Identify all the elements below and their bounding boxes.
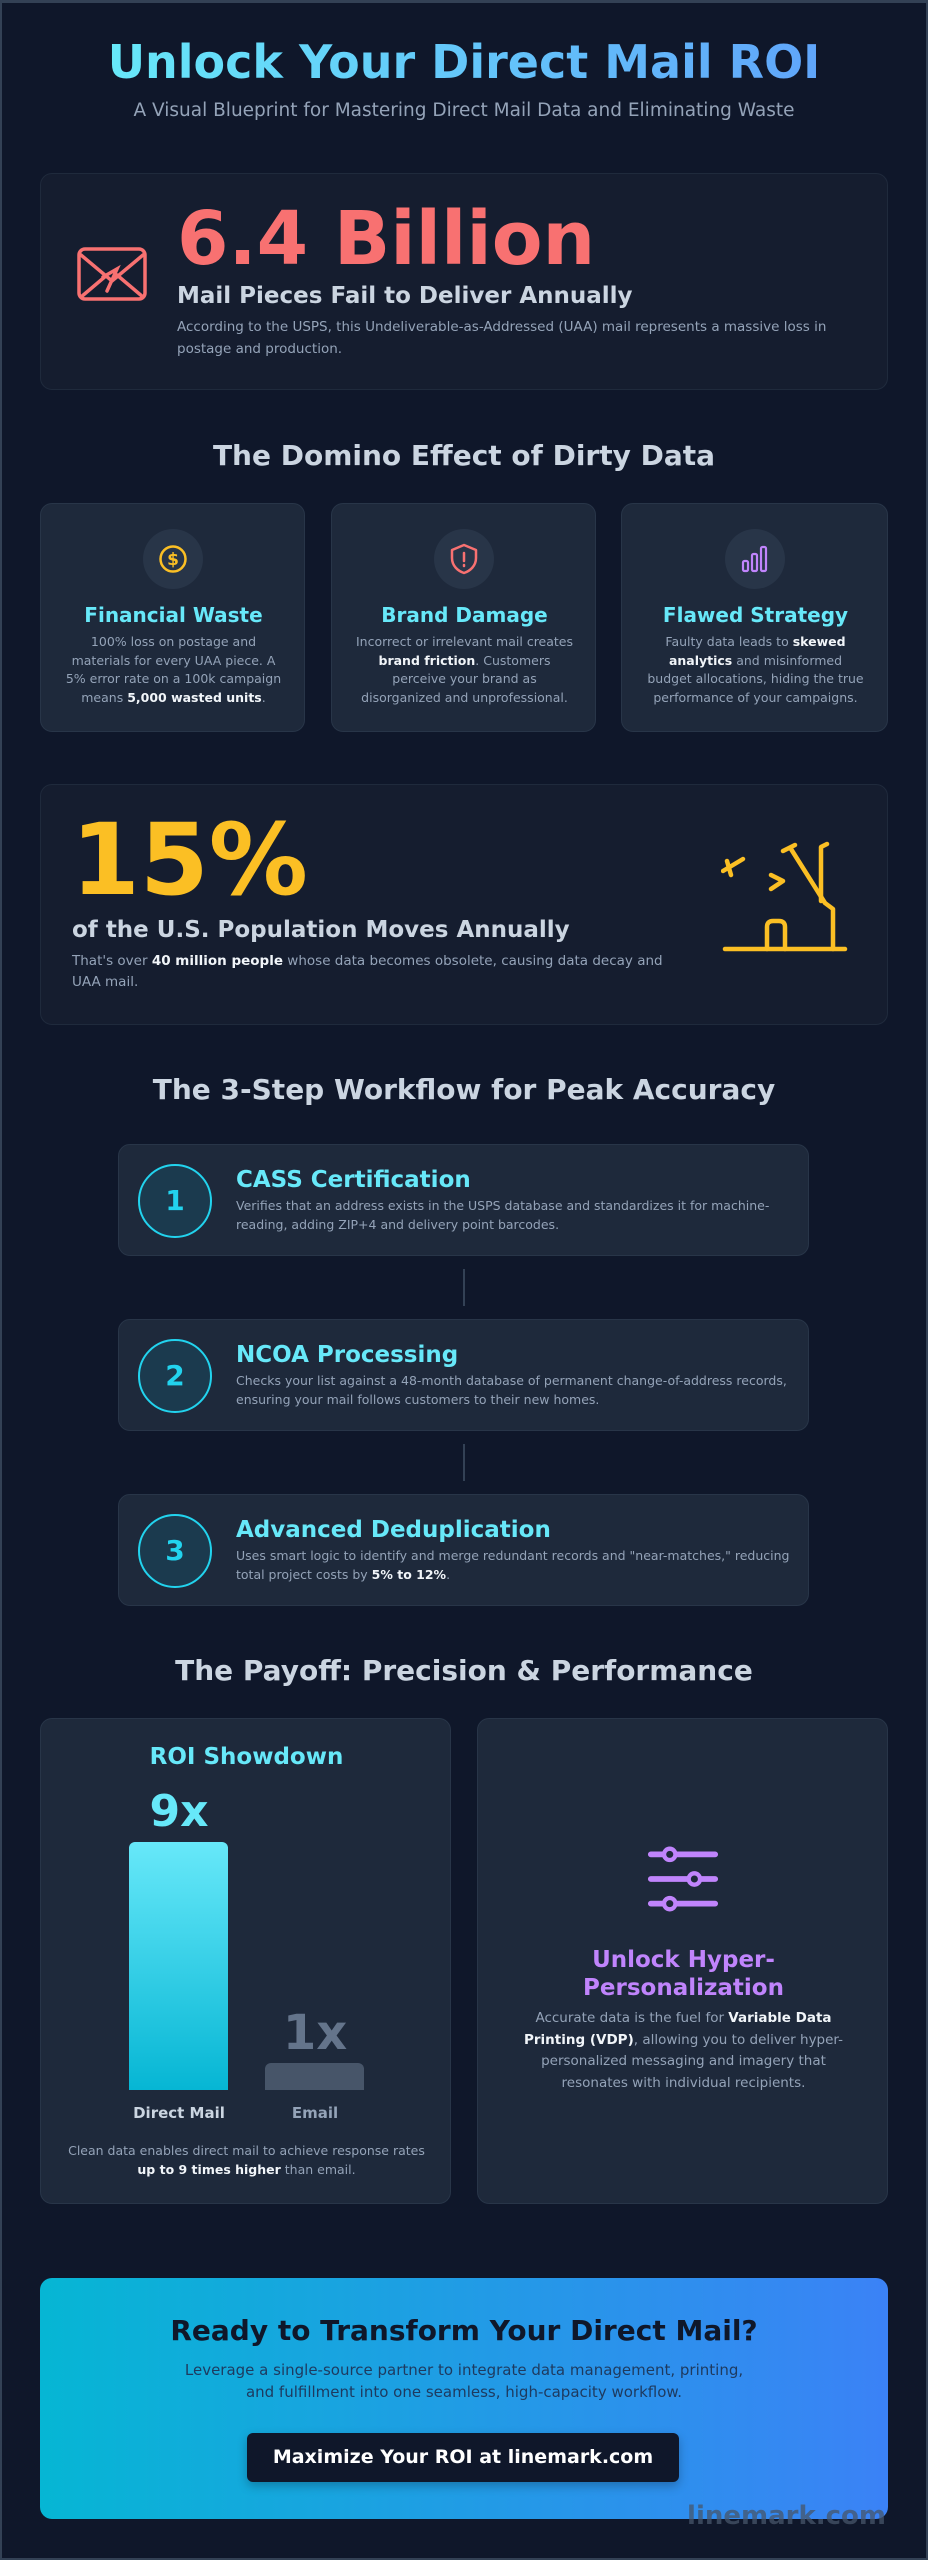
card text: means 5,000 wasted units. <box>81 690 266 705</box>
card text: disorganized and unprofessional. <box>361 690 568 705</box>
panel text: personalized messaging and imagery that <box>541 2053 826 2069</box>
chart caption: Clean data enables direct mail to achieve response rates <box>68 2143 425 2158</box>
card title: Brand Damage <box>381 603 548 627</box>
title: Unlock Your Direct Mail ROI <box>108 35 820 89</box>
subheading: Mail Pieces Fail to Deliver Annually <box>177 283 633 309</box>
card title: Financial Waste <box>84 603 263 627</box>
CTA text: Leverage a single-source partner to integrate data management, printing, <box>185 2361 743 2379</box>
panel: call to action <box>40 2278 888 2519</box>
CTA button: Maximize Your ROI at linemark.com <box>273 2446 653 2468</box>
icon: envelope <box>77 247 147 301</box>
description: UAA mail. <box>72 974 138 990</box>
step title: NCOA Processing <box>236 1342 458 1368</box>
number circle <box>138 1339 212 1413</box>
step text: Uses smart logic to identify and merge redundant records and "near-matches," reducing <box>236 1548 789 1563</box>
step 1 <box>118 1144 809 1256</box>
step 3 <box>118 1494 809 1606</box>
watermark: linemark.com <box>687 2501 886 2531</box>
step text: ensuring your mail follows customers to their new homes. <box>236 1392 599 1407</box>
value label 1x: 1x <box>283 2005 347 2061</box>
chart caption <box>68 2143 425 2177</box>
card text <box>356 634 573 705</box>
value label 9x: 9x <box>150 1786 208 1837</box>
CTA text <box>185 2361 743 2401</box>
heading: payoff: The Payoff: Precision & Performance <box>175 1654 753 1687</box>
card text <box>647 634 864 705</box>
step text: reading, adding ZIP+4 and delivery point barcodes. <box>236 1217 559 1232</box>
card text: 5% error rate on a 100k campaign <box>66 671 281 686</box>
subtitle: A Visual Blueprint for Mastering Direct Mail Data and Eliminating Waste <box>133 100 795 121</box>
heading: domino effect: The Domino Effect of Dirty Data <box>213 439 715 472</box>
bar: email <box>265 2063 364 2090</box>
step text: Verifies that an address exists in the USPS database and standardizes it for machine- <box>236 1198 769 1213</box>
step text <box>236 1198 769 1232</box>
card text: budget allocations, hiding the true <box>647 671 864 686</box>
panel title: Unlock Hyper- <box>592 1947 775 1973</box>
panel text <box>524 2010 843 2091</box>
panel: ROI showdown chart <box>40 1718 451 2204</box>
panel: hyper-personalization <box>477 1718 888 2204</box>
number circle: 1 <box>165 1184 185 1217</box>
number circle: 2 <box>165 1359 185 1392</box>
chart title: ROI Showdown <box>150 1744 343 1770</box>
step title: CASS Certification <box>236 1167 471 1193</box>
panel: financial waste <box>40 503 305 732</box>
panel: brand damage <box>331 503 596 732</box>
panel text: resonates with individual recipients. <box>562 2075 805 2091</box>
card text: Faulty data leads to skewed <box>665 634 846 649</box>
icon: dollar: $ <box>167 550 179 570</box>
description: postage and production. <box>177 341 342 357</box>
card text: 100% loss on postage and <box>91 634 256 649</box>
panel title <box>583 1947 784 2001</box>
panel title: Personalization <box>583 1975 784 2001</box>
heading: 3-step workflow: The 3-Step Workflow for Peak Accuracy <box>153 1073 775 1106</box>
description <box>177 319 826 357</box>
panel text: Printing (VDP), allowing you to deliver hyper- <box>524 2032 843 2048</box>
card text: performance of your campaigns. <box>653 690 858 705</box>
card text <box>66 634 281 705</box>
icon: shield <box>434 529 494 589</box>
icon: sliders <box>648 1846 718 1912</box>
step text <box>236 1548 789 1582</box>
card text: Incorrect or irrelevant mail creates <box>356 634 573 649</box>
subheading: of the U.S. Population Moves Annually <box>72 917 570 943</box>
description: According to the USPS, this Undeliverable-as-Addressed (UAA) mail represents a massive loss in <box>177 319 826 335</box>
number circle <box>138 1514 212 1588</box>
panel: 6.4 billion stat <box>40 173 888 390</box>
panel: flawed strategy <box>621 503 888 732</box>
card title: Flawed Strategy <box>663 603 848 627</box>
card text: materials for every UAA piece. A <box>72 653 275 668</box>
bar chart <box>129 1786 364 2122</box>
icon: bar chart <box>725 529 785 589</box>
card text: analytics and misinformed <box>669 653 842 668</box>
step text <box>236 1373 787 1407</box>
step text: total project costs by 5% to 12%. <box>236 1567 450 1582</box>
CTA button <box>247 2433 679 2482</box>
card text: perceive your brand as <box>392 671 537 686</box>
icon: dollar <box>143 529 203 589</box>
icon: moving house <box>721 842 848 952</box>
number circle: 3 <box>165 1534 185 1567</box>
CTA text: and fulfillment into one seamless, high-capacity workflow. <box>246 2383 682 2401</box>
step 2 <box>118 1319 809 1431</box>
description: That's over 40 million people whose data becomes obsolete, causing data decay and <box>72 953 663 969</box>
step title: Advanced Deduplication <box>236 1517 551 1543</box>
bar: direct mail <box>129 1842 228 2090</box>
description <box>72 953 663 990</box>
CTA heading: Ready to Transform Your Direct Mail? <box>170 2314 758 2347</box>
panel text: Accurate data is the fuel for Variable Data <box>535 2010 832 2026</box>
number circle <box>138 1164 212 1238</box>
big number: 15% <box>71 803 308 918</box>
axis labels: Direct Mail <box>133 2104 225 2122</box>
big number: 6.4 Billion <box>177 196 595 282</box>
bar chart: Email <box>292 2104 338 2122</box>
panel: 15% stat <box>40 784 888 1025</box>
chart caption: up to 9 times higher than email. <box>137 2162 356 2177</box>
card text: brand friction. Customers <box>378 653 550 668</box>
step text: Checks your list against a 48-month database of permanent change-of-address records, <box>236 1373 787 1388</box>
